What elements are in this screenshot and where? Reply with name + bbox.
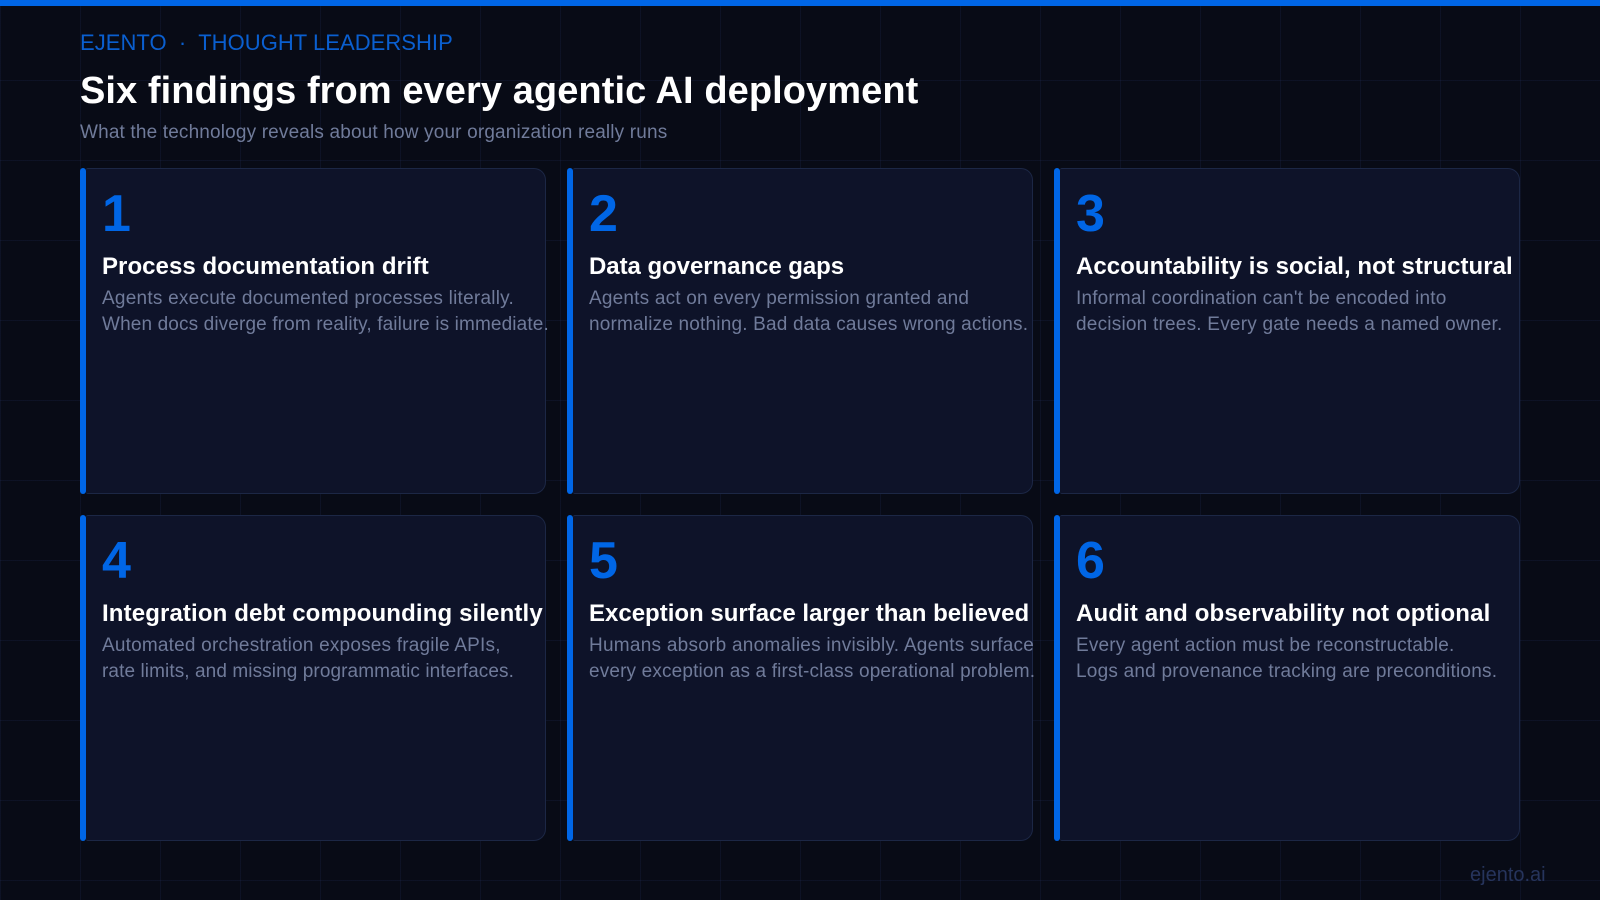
- text: finding 2: normalize nothing. Bad data causes wrong actions.: [589, 314, 1028, 335]
- text: finding 1: When docs diverge from reality, failure is immediate.: [102, 314, 549, 335]
- text: finding 6: Every agent action must be reconstructable.: [1076, 635, 1454, 656]
- heading: finding 5: Exception surface larger than believed: [589, 600, 1029, 627]
- text: finding 4: rate limits, and missing programmatic interfaces.: [102, 661, 514, 682]
- text: finding 6: [1076, 635, 1497, 682]
- heading: finding 6: Audit and observability not optional: [1076, 600, 1490, 627]
- panel: finding 5: [567, 515, 1033, 841]
- heading: finding 3: Accountability is social, not structural: [1076, 253, 1513, 280]
- number 6: 6: [1076, 532, 1105, 590]
- text: finding 2: [589, 288, 1028, 335]
- heading: finding 4: Integration debt compounding silently: [102, 600, 543, 627]
- panel: finding 4: [80, 515, 546, 841]
- number 1: 1: [102, 185, 131, 243]
- text: finding 5: [589, 635, 1035, 682]
- text: finding 5: every exception as a first-class operational problem.: [589, 661, 1035, 682]
- heading: finding 2: Data governance gaps: [589, 253, 844, 280]
- number 3: 3: [1076, 185, 1105, 243]
- panel: finding 3: [1054, 168, 1520, 494]
- panel: finding 6: [1054, 515, 1520, 841]
- top accent bar: [0, 0, 1600, 6]
- text: finding 3: Informal coordination can't be encoded into: [1076, 288, 1446, 309]
- text: finding 4: Automated orchestration exposes fragile APIs,: [102, 635, 501, 656]
- heading: finding 1: Process documentation drift: [102, 253, 429, 280]
- eyebrow label: EJENTO · THOUGHT LEADERSHIP: [80, 30, 453, 54]
- text: finding 3: decision trees. Every gate needs a named owner.: [1076, 314, 1502, 335]
- text: finding 6: Logs and provenance tracking are preconditions.: [1076, 661, 1497, 682]
- text: finding 1: Agents execute documented processes literally.: [102, 288, 514, 309]
- text: finding 2: Agents act on every permission granted and: [589, 288, 969, 309]
- number 2: 2: [589, 185, 618, 243]
- footer brand: ejento.ai: [1470, 864, 1546, 886]
- number 4: 4: [102, 532, 131, 590]
- title: Six findings from every agentic AI deployment: [80, 70, 918, 112]
- number 5: 5: [589, 532, 618, 590]
- text: finding 5: Humans absorb anomalies invisibly. Agents surface: [589, 635, 1034, 656]
- panel: finding 1: [80, 168, 546, 494]
- panel: finding 2: [567, 168, 1033, 494]
- subtitle: What the technology reveals about how your organization really runs: [80, 122, 667, 142]
- text: finding 4: [102, 635, 514, 682]
- text: finding 3: [1076, 288, 1502, 335]
- text: finding 1: [102, 288, 549, 335]
